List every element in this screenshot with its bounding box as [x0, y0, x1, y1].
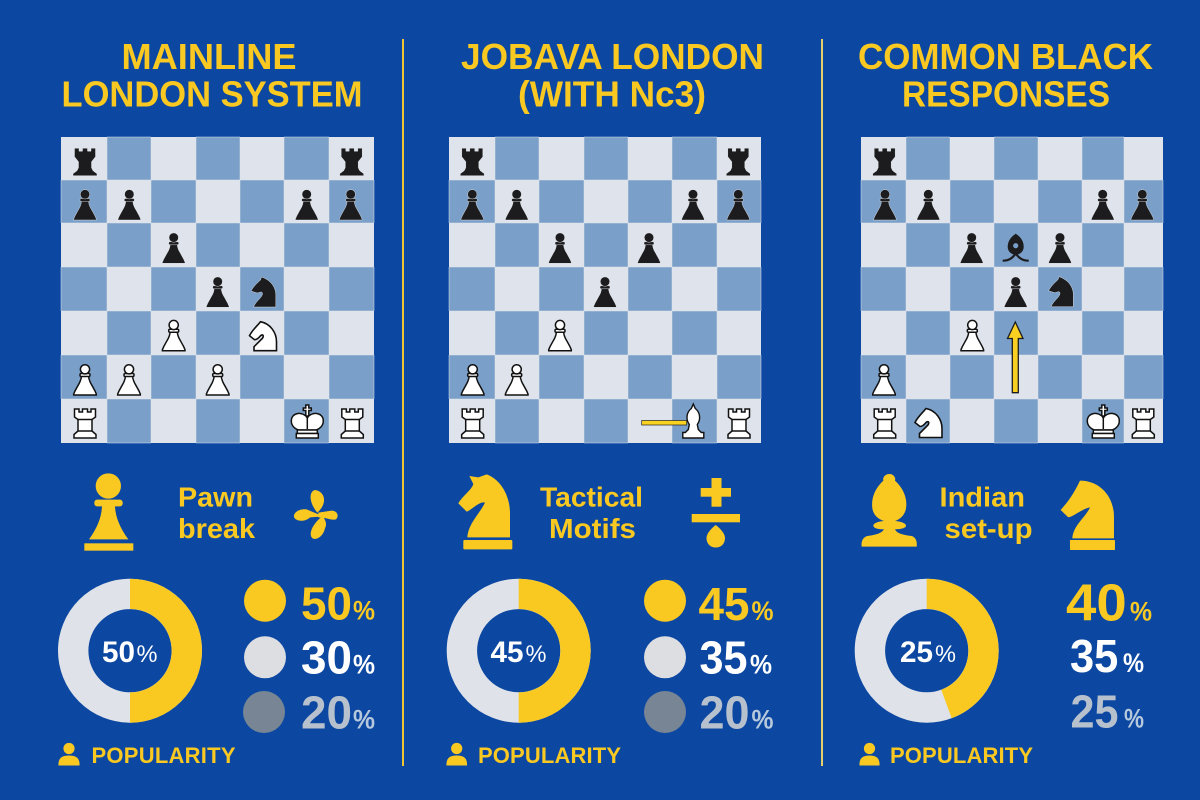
popularity label: POPULARITY — [890, 743, 1033, 768]
legend: 45 / 35 / 20 — [644, 578, 774, 738]
popularity label: POPULARITY — [92, 743, 236, 768]
label: tactical motifs — [540, 482, 643, 544]
icon: pawn break sprout — [294, 490, 338, 539]
legend: 50 / 30 / 20 — [243, 577, 375, 738]
white pieces — [461, 320, 750, 438]
title: mainline london system: LONDON SYSTEM — [62, 74, 362, 114]
label: pawn break: break — [178, 513, 255, 544]
icon: yellow knight right — [1061, 481, 1115, 550]
label: indian set-up: Indian — [940, 482, 1025, 513]
legend: 40 / 35 / 25: % — [1123, 648, 1144, 678]
yellow move bar — [642, 420, 687, 425]
title: jobava london: JOBAVA LONDON — [461, 36, 764, 77]
legend: 50 / 30 / 20: % — [353, 595, 375, 625]
panel: mainline london system — [58, 36, 375, 768]
chess board: mainline — [61, 137, 374, 443]
icon: yellow bishop — [862, 474, 917, 547]
legend: 40 / 35 / 25: 25 — [1070, 686, 1118, 738]
legend: 40 / 35 / 25: % — [1124, 704, 1144, 734]
black pieces — [460, 148, 750, 307]
legend: 50 / 30 / 20: % — [353, 704, 375, 734]
panel: common black responses — [858, 36, 1163, 768]
arrow: yellow move — [1008, 322, 1023, 393]
divider — [821, 39, 823, 766]
legend: 45 / 35 / 20: 45 — [698, 578, 750, 630]
black pieces — [73, 148, 364, 307]
donut chart: 45%: 45 — [490, 636, 524, 669]
legend: 50 / 30 / 20: 20 — [301, 686, 352, 738]
title: common black responses — [858, 36, 1153, 114]
title: jobava london: (WITH Nc3) — [518, 74, 706, 114]
donut chart: 25% — [870, 579, 999, 718]
legend: 45 / 35 / 20: 35 — [700, 631, 748, 683]
chess board: black responses — [861, 137, 1163, 443]
title: common black responses: RESPONSES — [902, 74, 1110, 114]
icon: plus over divider with drop — [692, 478, 740, 548]
popularity label: POPULARITY — [478, 743, 621, 768]
label: indian set-up: set-up — [944, 513, 1032, 544]
chess board: jobava — [449, 137, 761, 443]
donut chart: 25%: % — [935, 641, 956, 668]
black pieces — [873, 148, 1154, 307]
donut chart: 50% — [73, 579, 202, 723]
white pieces — [74, 320, 363, 438]
legend: 40 / 35 / 25: 40 — [1066, 575, 1127, 633]
title: mainline london system — [62, 36, 362, 114]
legend: 45 / 35 / 20: % — [752, 704, 774, 734]
donut chart: 50%: 50 — [102, 636, 135, 669]
legend: 45 / 35 / 20: % — [752, 596, 774, 626]
icon: yellow knight — [458, 474, 512, 549]
legend: 40 / 35 / 25: 35 — [1070, 630, 1118, 682]
white pieces — [873, 320, 1154, 438]
legend: 50 / 30 / 20: % — [353, 649, 375, 679]
title: mainline london system: MAINLINE — [122, 36, 296, 77]
donut chart: 50%: % — [136, 641, 158, 668]
divider — [402, 39, 404, 766]
donut chart: 45%: % — [526, 641, 546, 668]
label: pawn break — [178, 482, 255, 544]
legend: 50 / 30 / 20: 30 — [301, 631, 352, 683]
label: tactical motifs: Tactical — [540, 482, 643, 513]
title: jobava london — [461, 36, 764, 114]
legend: 45 / 35 / 20: 20 — [700, 686, 750, 738]
title: common black responses: COMMON BLACK — [858, 36, 1153, 77]
legend: 40 / 35 / 25 — [1066, 575, 1152, 738]
donut chart: 25%: 25 — [900, 636, 933, 669]
donut chart: 45% — [462, 579, 591, 723]
label: indian set-up — [940, 482, 1032, 544]
panel: jobava london — [446, 36, 774, 768]
legend: 50 / 30 / 20: 50 — [301, 577, 352, 629]
legend: 45 / 35 / 20: % — [750, 649, 772, 679]
icon: yellow pawn — [84, 473, 133, 551]
label: pawn break: Pawn — [178, 482, 253, 513]
legend: 40 / 35 / 25: % — [1130, 597, 1152, 627]
label: tactical motifs: Motifs — [549, 513, 636, 544]
